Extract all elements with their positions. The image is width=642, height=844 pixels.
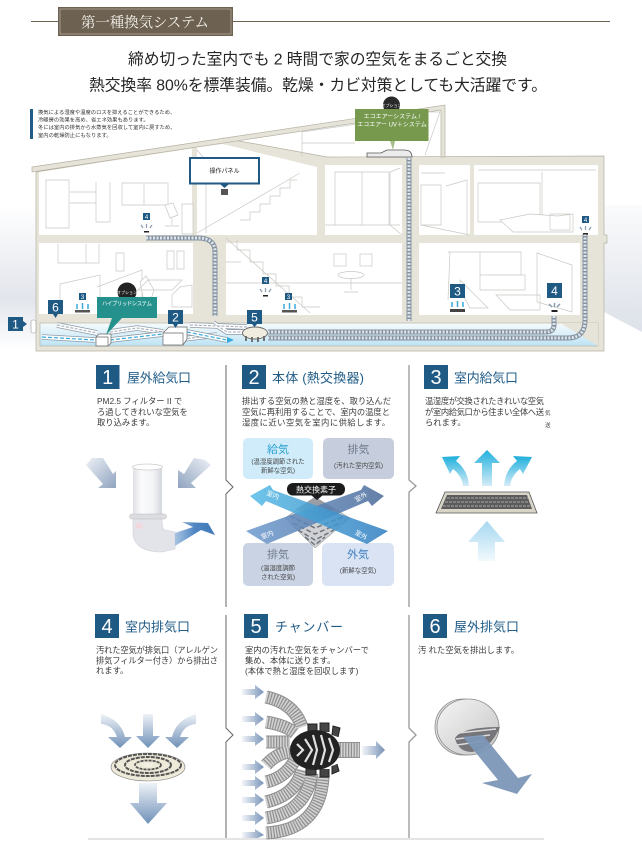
exhaust air box bottom bbox=[243, 543, 313, 586]
header: section title bar: 第一種換気システム bbox=[81, 14, 209, 32]
vertical dividers with chevrons bbox=[88, 365, 544, 839]
badge 1 bbox=[8, 317, 36, 333]
badge 3 small left bbox=[75, 293, 90, 312]
heading 4 bbox=[95, 614, 190, 638]
panel 5: chamber bbox=[242, 614, 385, 838]
icon: intake pipe with arrows bbox=[86, 458, 215, 552]
badge 3 small center: 3 bbox=[287, 295, 291, 301]
text 3: 送 bbox=[545, 421, 551, 429]
heading 4: 4 bbox=[101, 616, 113, 638]
panel 1: outdoor air intake bbox=[86, 365, 215, 552]
text 1 bbox=[97, 396, 188, 428]
icon: exhaust grate with arrows bbox=[101, 714, 196, 824]
exhaust air box top bbox=[323, 438, 394, 479]
heading 2 bbox=[242, 365, 364, 389]
green option callout: eco air system: エコエアー UV＋システム bbox=[357, 122, 427, 128]
text 2: 湿度に近い空気を室内に供給します。 bbox=[242, 418, 390, 428]
heat exchange element with arrows: 熱交換素子 bbox=[296, 484, 336, 494]
note text with blue bar: 冬には室内の排気から水蒸気を回収して室内に戻すため、 bbox=[38, 123, 176, 131]
text 2: 空気に再利用することで、室内の温度と bbox=[242, 407, 390, 417]
panel 4: indoor exhaust vent bbox=[95, 614, 218, 824]
exhaust air box bottom: 排気 bbox=[267, 547, 289, 561]
badge 5 bbox=[247, 310, 262, 327]
text 2 bbox=[242, 396, 391, 428]
badge 4 small upstairs right bbox=[580, 216, 591, 234]
operation panel callout: 操作パネル bbox=[209, 167, 240, 175]
main units in crawl space bbox=[96, 327, 268, 346]
badge 4 large bbox=[547, 283, 562, 312]
badge 2: 2 bbox=[172, 310, 179, 324]
panel 3: indoor supply vent bbox=[424, 365, 551, 561]
teal option callout: hybrid system: オプション bbox=[117, 289, 137, 295]
badge 4 small upstairs left bbox=[141, 213, 152, 232]
text 3: られます。 bbox=[425, 418, 466, 428]
exhaust air box bottom: (温湿度調節 bbox=[261, 563, 296, 572]
badge 4 small stairs bbox=[260, 277, 271, 296]
heading 5: 5 bbox=[250, 616, 262, 638]
headline text: 熱交換率 80%を標準装備。乾燥・カビ対策としても大活躍です。 bbox=[89, 76, 547, 94]
chamber body bbox=[306, 723, 340, 777]
heading 6: 6 bbox=[429, 616, 441, 638]
text 1: 取り込みます。 bbox=[97, 418, 154, 428]
badge 3 large: 3 bbox=[454, 284, 461, 298]
text 4: 排気フィルター付き）から排出さ bbox=[96, 656, 218, 666]
teal option callout: hybrid system bbox=[97, 282, 157, 335]
note text with blue bar: 冷暖房の効果を高め、省エネ効果もあります。 bbox=[38, 116, 149, 124]
badge 4 small stairs: 4 bbox=[264, 279, 268, 285]
badge 4 large: 4 bbox=[551, 284, 558, 298]
supply air box: 給気 bbox=[267, 442, 289, 456]
panel 2: main unit heat exchanger bbox=[242, 365, 394, 586]
heading 1: 1 bbox=[102, 367, 113, 389]
exhaust air box top: (汚れた室内空気) bbox=[334, 460, 383, 470]
heading 3: 3 bbox=[430, 367, 442, 389]
text 3: が室内給気口から住まい全体へ送 bbox=[425, 407, 544, 417]
text 2: 排出する空気の熱と湿度を、取り込んだ bbox=[242, 396, 391, 406]
outside air box: (新鮮な空気) bbox=[340, 566, 376, 574]
text 1: ろ過してきれいな空気を bbox=[97, 407, 188, 417]
text 3: 気 bbox=[545, 409, 551, 417]
house cutaway illustration bbox=[8, 96, 607, 351]
heading 2: 本体 (熱交換器) bbox=[272, 370, 364, 386]
text 4: 汚れた空気が排気口（アレルゲン bbox=[96, 645, 218, 655]
heat exchange element with arrows: 室外 bbox=[353, 528, 370, 542]
map number badges bbox=[8, 213, 591, 333]
exhaust air box top: 排気 bbox=[348, 442, 370, 456]
heading 5 bbox=[244, 614, 343, 638]
text 6: 汚 れた空気を排出します。 bbox=[418, 645, 519, 655]
icon: exhaust hood with arrow bbox=[435, 699, 532, 794]
badge 3 small center bbox=[282, 293, 297, 312]
badge 3 large bbox=[450, 284, 465, 312]
green option callout: eco air system: エコエアーシステム / bbox=[364, 114, 421, 120]
outside air box bbox=[322, 543, 394, 586]
green option callout: eco air system: オプション bbox=[382, 102, 402, 108]
exhaust air box bottom: された空気) bbox=[261, 572, 295, 581]
heading 1: 屋外給気口 bbox=[127, 370, 191, 386]
teal option callout: hybrid system: ハイブリッドシステム bbox=[102, 300, 152, 308]
text 5 bbox=[245, 645, 369, 676]
supply air box bbox=[243, 438, 313, 479]
heading 1 bbox=[96, 365, 191, 389]
text 5: 集め、本体に送ります。 bbox=[245, 656, 335, 666]
badge 1: 1 bbox=[12, 318, 19, 332]
heat exchange element with arrows: 室内 bbox=[265, 488, 281, 501]
house structure bbox=[32, 105, 607, 351]
crawl-space ducts bbox=[57, 323, 247, 339]
headline text: 締め切った室内でも 2 時間で家の空気をまるごと交換 bbox=[128, 50, 507, 68]
heading 3 bbox=[424, 365, 518, 389]
text 3 bbox=[425, 396, 551, 429]
background gradients behind house bbox=[0, 205, 642, 350]
supply air box: (温湿度調節された bbox=[251, 456, 305, 466]
room furniture line drawings bbox=[46, 150, 596, 314]
heading 3: 室内給気口 bbox=[454, 370, 518, 386]
operation panel callout bbox=[190, 158, 259, 195]
panel 6: outdoor exhaust vent bbox=[418, 614, 532, 794]
badge 2 bbox=[168, 310, 183, 328]
supply air box: 新鮮な空気) bbox=[261, 466, 295, 474]
badge 6 bbox=[48, 300, 63, 318]
icon: chamber with ducts and arrows bbox=[242, 685, 385, 838]
heading 6 bbox=[423, 614, 519, 638]
heading 5: チャンバー bbox=[275, 620, 343, 634]
badge 6: 6 bbox=[52, 300, 59, 314]
heat exchange element with arrows bbox=[246, 483, 388, 548]
inflow arrows bbox=[242, 685, 264, 838]
headline text bbox=[89, 50, 547, 94]
header: section title bar bbox=[31, 7, 610, 36]
note text with blue bar: 換気による湿度や温度のロスを抑えることができるため、 bbox=[38, 108, 175, 116]
text 3: 温湿度が交換されたきれいな空気 bbox=[425, 396, 544, 406]
heading 4: 室内排気口 bbox=[125, 620, 190, 634]
heat exchange element with arrows: 室外 bbox=[353, 489, 369, 504]
outside air box: 外気 bbox=[347, 547, 369, 561]
eco air unit in attic bbox=[367, 150, 412, 157]
flexible ducts bbox=[266, 697, 323, 833]
badge 4 small upstairs right: 4 bbox=[584, 218, 588, 224]
heat exchange element with arrows: 室内 bbox=[259, 528, 275, 541]
ventilation ducts bbox=[42, 150, 585, 343]
text 4 bbox=[96, 645, 218, 676]
heading 2: 2 bbox=[248, 367, 260, 389]
text 1: PM2.5 フィルター II で bbox=[97, 396, 182, 406]
green option callout: eco air system bbox=[355, 96, 428, 150]
icon: supply grille with blue arrows bbox=[436, 450, 537, 561]
text 5: (本体で熱と湿度を回収します) bbox=[245, 666, 359, 676]
note text with blue bar bbox=[30, 108, 176, 139]
text 4: れます。 bbox=[96, 666, 128, 676]
text 5: 室内の汚れた空気をチャンバーで bbox=[245, 645, 369, 655]
badge 5: 5 bbox=[251, 310, 258, 324]
heading 6: 屋外排気口 bbox=[454, 620, 519, 634]
note text with blue bar: 室内の乾燥防止にもなります。 bbox=[38, 131, 112, 139]
badge 4 small upstairs left: 4 bbox=[145, 215, 149, 221]
badge 3 small left: 3 bbox=[81, 295, 85, 301]
